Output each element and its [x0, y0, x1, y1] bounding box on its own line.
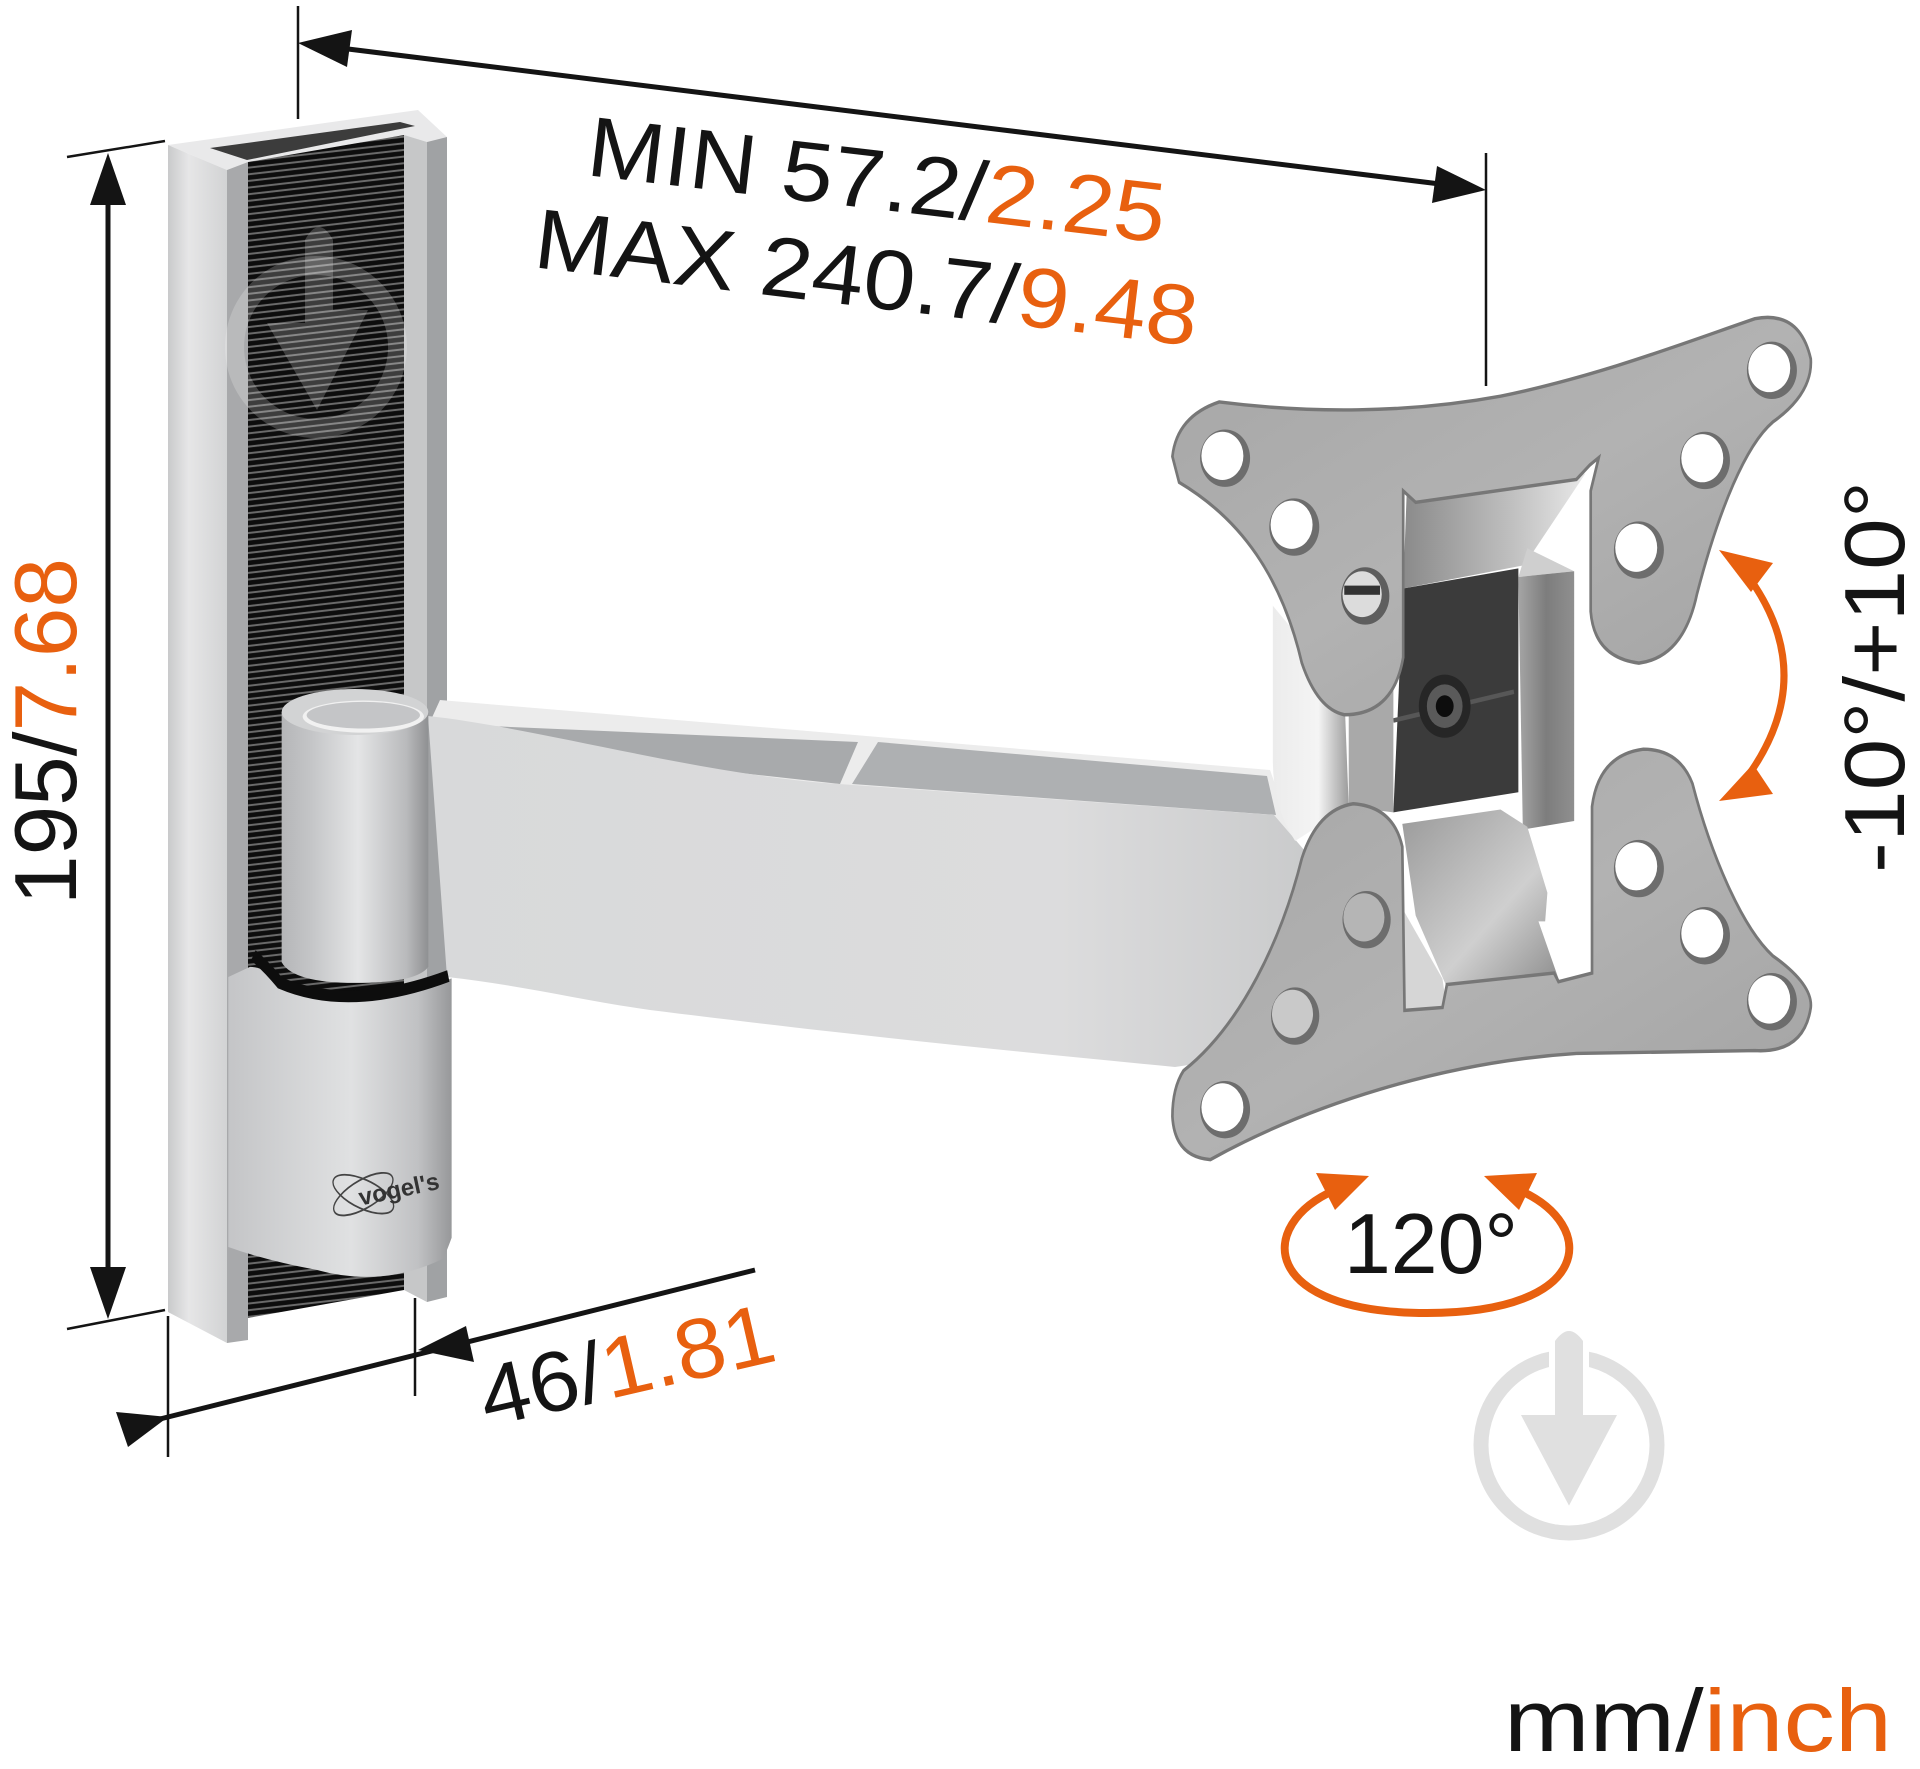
pivot cylinder and housing with logo: [228, 689, 452, 1277]
dimension: rail height: [67, 141, 165, 1329]
arrow: swivel range: [1285, 1173, 1569, 1313]
logo: vogel's: [356, 1168, 442, 1212]
cylinder: [282, 712, 428, 983]
label: min / max extension: MIN 57.2/2.25: [583, 100, 1171, 262]
label: min / max extension: MAX 240.7/ 9.48: [530, 192, 1203, 365]
arrow: tilt range: [1719, 550, 1784, 801]
wall rail: [168, 110, 447, 1343]
top plate: [1172, 317, 1811, 715]
dimension: arm extension: [298, 6, 1486, 386]
swing arm: [428, 700, 1330, 1067]
centre bolt: [1393, 675, 1514, 738]
upper bracket: [1403, 474, 1585, 588]
vertical strip: [1349, 686, 1393, 812]
bottom plate: [1172, 749, 1811, 1160]
watermark icon: [1481, 1328, 1657, 1533]
unit legend: mm/ inch: [1504, 1671, 1892, 1769]
right flange: [1518, 548, 1574, 830]
label: min / max extension: [530, 100, 1203, 365]
dimension: rail width: [116, 1270, 755, 1457]
housing: [228, 967, 452, 1277]
dark plastic block: [1393, 568, 1518, 812]
lower bracket wedge: [1403, 910, 1447, 1012]
black ring: [253, 955, 448, 996]
cylinder cap: [282, 689, 428, 735]
tilting mounting plate: [1172, 317, 1811, 1160]
rear cylinder: [1273, 606, 1349, 841]
logo: [330, 1164, 442, 1224]
label: swivel range: 120°: [1344, 1197, 1518, 1292]
watermark on rail: [225, 227, 407, 438]
label: rail width: 46/1.81: [470, 1286, 784, 1446]
mounting holes: [1200, 342, 1797, 1138]
lower bracket: [1402, 809, 1559, 987]
